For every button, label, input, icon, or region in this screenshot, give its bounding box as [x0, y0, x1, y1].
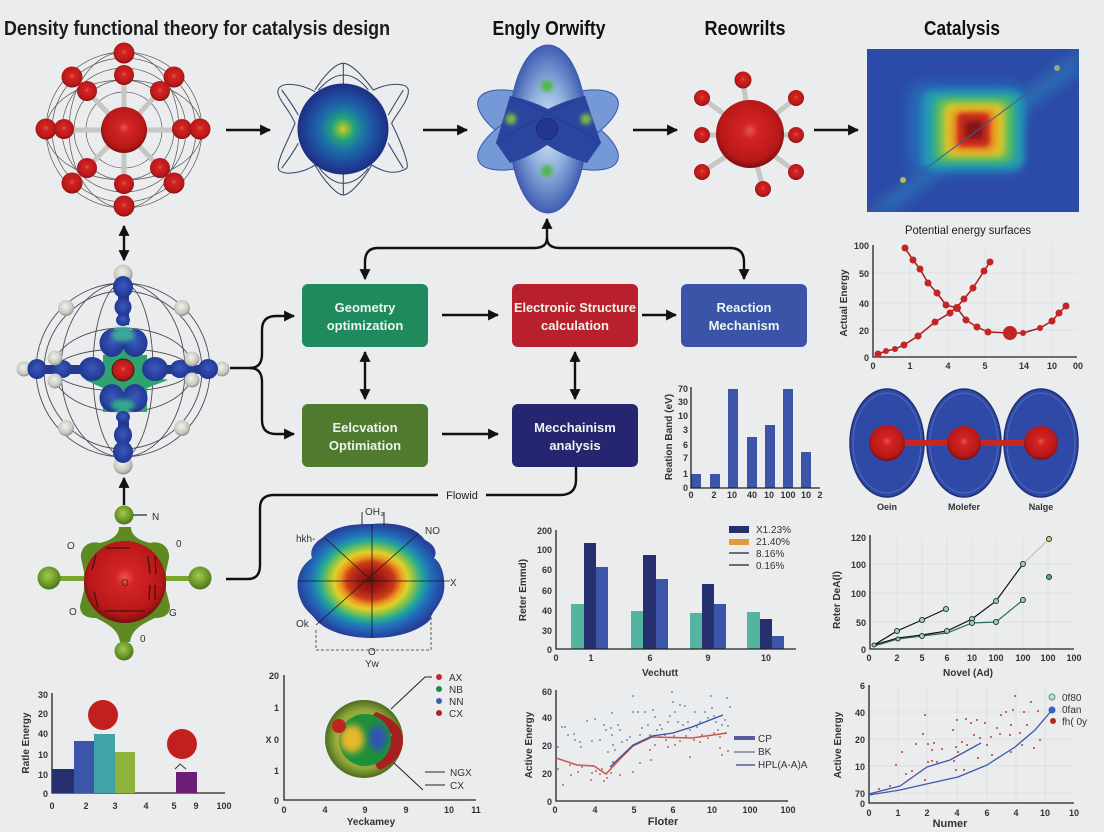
bar chart: grouped bars: 6 [647, 653, 653, 663]
scatter chart: active energy vs numer: 2 [924, 808, 930, 818]
scatter chart: active energy vs numer: 6 [860, 681, 865, 691]
bar chart: reaction band: 6 [683, 440, 688, 450]
heat map: elliptical density: O [368, 647, 376, 658]
line chart: novel: 100 [851, 560, 866, 570]
chart: layered sphere with legend: AX [449, 673, 463, 684]
box: reaction mechanism: Reaction [717, 300, 772, 315]
scatter chart: active energy vs numer: 0 [860, 799, 865, 809]
box: reaction mechanism: Mechanism [709, 318, 779, 333]
scatter chart: active energy vs floter: 0 [552, 805, 558, 815]
connector: flow line [226, 467, 576, 579]
arrow [633, 129, 677, 131]
chart: potential energy surfaces: Actual Energy [839, 269, 850, 337]
box: mechanism analysis: analysis [549, 438, 601, 453]
molecule: green shell around red sphere: O [69, 607, 77, 618]
arrows: molecule to optimization boxes [230, 316, 294, 434]
box: electronic structure calculation: Electronic Structure [514, 300, 636, 315]
diagram: three blue lobes with red atoms: Oein [877, 502, 897, 512]
heat map: elliptical density: Ok [296, 619, 310, 630]
bar chart: reaction band [664, 384, 823, 500]
molecule: green shell around red sphere: N [152, 512, 159, 523]
bar chart: bottom left energy: 40 [38, 729, 48, 739]
molecule: green shell around red sphere: O [121, 578, 129, 589]
arrow [423, 129, 467, 131]
box: mechanism analysis: Mecchainism [534, 420, 616, 435]
bar chart: reaction band: Reation Band (eV) [664, 394, 675, 480]
connector: flow line: Flowid [446, 490, 478, 502]
chart: layered sphere with legend: 0 [281, 805, 287, 815]
orbital: blue lobes [467, 45, 629, 213]
molecule: green shell around red sphere: 0 [176, 539, 182, 550]
scatter chart: active energy vs floter: 100 [780, 805, 796, 815]
bar chart: reaction band: 0 [683, 483, 688, 493]
chart: potential energy surfaces: 5 [982, 361, 988, 371]
bar chart: grouped bars: 40 [542, 606, 552, 616]
chart: potential energy surfaces: 00 [1073, 361, 1083, 371]
scatter chart: active energy vs floter: 60 [542, 687, 552, 697]
scatter chart: active energy vs numer: Active Energy [833, 711, 844, 778]
scatter chart: active energy vs floter: Active Energy [524, 711, 535, 778]
arrow [442, 433, 498, 435]
double arrow [574, 352, 576, 399]
line chart: novel: 6 [944, 653, 950, 663]
bar chart: bottom left energy: 5 [171, 801, 177, 811]
bar chart: reaction band: 3 [683, 425, 688, 435]
scatter chart: active energy vs numer: 0 [866, 808, 872, 818]
bar chart: grouped bars: 21.40% [756, 537, 790, 548]
molecule: green shell around red sphere: O [67, 541, 75, 552]
bar chart: grouped bars: 100 [537, 545, 552, 555]
scatter chart: active energy vs numer: 6 [984, 808, 990, 818]
bar chart: bottom left energy: 30 [38, 690, 48, 700]
scatter chart: active energy vs numer: Numer [933, 818, 968, 830]
chart: layered sphere with legend: 9 [403, 805, 409, 815]
chart: layered sphere with legend: NGX [450, 768, 472, 779]
molecule: blue cross with rings [16, 264, 230, 474]
bar chart: reaction band: 10 [678, 411, 688, 421]
bar chart: grouped bars: 0 [553, 653, 559, 663]
diagram: three blue lobes with red atoms [850, 389, 1078, 512]
line chart: novel: Reter DeA(l) [832, 571, 843, 629]
line chart: novel: Novel (Ad) [943, 668, 993, 679]
chart: layered sphere with legend: NB [449, 685, 463, 696]
title: Density functional theory for catalysis design [4, 18, 390, 40]
diagram: three blue lobes with red atoms: Molefer [948, 502, 980, 512]
chart: potential energy surfaces: 14 [1019, 361, 1029, 371]
scatter chart: active energy vs floter: 4 [592, 805, 598, 815]
double arrow [364, 352, 366, 399]
box: elevation optimization: Eelcvation [332, 420, 398, 435]
bar chart: grouped bars: 8.16% [756, 549, 784, 560]
line chart: novel: 2 [894, 653, 900, 663]
line chart: novel: 100 [1066, 653, 1082, 663]
scatter chart: active energy vs numer: 4 [954, 808, 960, 818]
chart: layered sphere with legend: 11 [471, 805, 481, 815]
bar chart: bottom left energy: 4 [143, 801, 149, 811]
line chart: novel [832, 533, 1082, 679]
line chart: novel: 100 [1040, 653, 1056, 663]
heat map: elliptical density: X [450, 578, 457, 589]
bar chart: bottom left energy: 9 [193, 801, 199, 811]
arrow [814, 129, 858, 131]
chart: potential energy surfaces: 1 [907, 361, 913, 371]
box: elevation optimization: Optimiation [329, 438, 401, 453]
scatter chart: active energy vs floter: 5 [631, 805, 637, 815]
chart: potential energy surfaces: 10 [1047, 361, 1057, 371]
bar chart: grouped bars: 60 [542, 586, 552, 596]
scatter chart: active energy vs floter: 100 [742, 805, 758, 815]
chart: layered sphere with legend: CX [450, 781, 464, 792]
chart: potential energy surfaces: 4 [945, 361, 951, 371]
heading: results: Reowrilts [704, 18, 786, 40]
chart: potential energy surfaces: 20 [859, 326, 869, 336]
orbital: density sphere with petals [278, 63, 408, 195]
bar chart: bottom left energy: 10 [38, 750, 48, 760]
bar chart: grouped bars: 30 [542, 626, 552, 636]
line chart: novel: 120 [851, 533, 866, 543]
heat map: elliptical density: NO [425, 526, 440, 537]
bar chart: reaction band: 1 [683, 469, 688, 479]
chart: layered sphere with legend: 10 [444, 805, 454, 815]
arrow [226, 129, 270, 131]
box: geometry optimization: optimization [327, 318, 403, 333]
line chart: novel: 0 [866, 653, 872, 663]
bar chart: reaction band: 10 [727, 490, 737, 500]
chart: layered sphere with legend: 4 [322, 805, 328, 815]
chart: layered sphere with legend: NN [449, 697, 463, 708]
line chart: novel: 50 [856, 618, 866, 628]
bar chart: grouped bars: 9 [705, 653, 711, 663]
chart: layered sphere with legend: 1 [274, 703, 279, 713]
bar chart: grouped bars: X1.23% [756, 525, 791, 536]
scatter chart: active energy vs numer: 10 [1040, 808, 1050, 818]
double arrow [123, 226, 125, 260]
bar chart: grouped bars: Vechutt [642, 668, 679, 679]
chart: layered sphere with legend [265, 671, 481, 828]
box: elevation optimization [302, 404, 428, 467]
box: reaction mechanism [681, 284, 807, 347]
bar chart: grouped bars: 1 [588, 653, 594, 663]
box: electronic structure calculation [512, 284, 638, 347]
arrow [642, 314, 676, 316]
bar chart: bottom left energy: 2 [83, 801, 89, 811]
scatter chart: active energy vs numer: 4 [1013, 808, 1019, 818]
scatter chart: active energy vs floter: HPL(A-A)A [758, 760, 808, 771]
bar chart: reaction band: 40 [747, 490, 757, 500]
bar chart: reaction band: 10 [764, 490, 774, 500]
scatter chart: active energy vs floter: 0 [547, 797, 552, 807]
molecule: green shell around red sphere: 0 [140, 634, 146, 645]
heatmap: catalysis [867, 49, 1079, 212]
scatter chart: active energy vs floter: CP [758, 734, 772, 745]
scatter chart: active energy vs floter: 40 [542, 713, 552, 723]
scatter chart: active energy vs numer [833, 681, 1087, 830]
arrows: top bus from orbitals to boxes [365, 219, 744, 279]
scatter chart: active energy vs numer: 1 [895, 808, 901, 818]
molecule: green shell around red sphere: G [169, 608, 177, 619]
scatter chart: active energy vs numer: 70 [855, 789, 865, 799]
bar chart: reaction band: 7 [683, 453, 688, 463]
molecule: green shell around red sphere [38, 506, 212, 660]
bar chart: grouped bars: 60 [542, 565, 552, 575]
scatter chart: active energy vs numer: 10 [855, 762, 865, 772]
bar chart: grouped bars: 0 [547, 645, 552, 655]
bar chart: reaction band: 2 [711, 490, 717, 500]
bar chart: reaction band: 70 [678, 384, 688, 394]
chart: layered sphere with legend: 0 [274, 796, 279, 806]
bar chart: bottom left energy: 0 [49, 801, 55, 811]
chart: layered sphere with legend: Yeckamey [347, 817, 396, 828]
box: electronic structure calculation: calculation [541, 318, 609, 333]
molecule: red wireframe cluster [36, 42, 210, 216]
bar chart: grouped bars: 200 [537, 526, 552, 536]
chart: layered sphere with legend: X 0 [265, 735, 279, 745]
heat map: elliptical density: Yw [365, 659, 380, 670]
chart: potential energy surfaces: 100 [854, 241, 869, 251]
chart: layered sphere with legend: CX [449, 709, 463, 720]
scatter chart: active energy vs numer: fh( 0y [1062, 717, 1087, 728]
heading: catalysis: Catalysis [924, 18, 1000, 40]
scatter chart: active energy vs floter [524, 687, 808, 828]
scatter chart: active energy vs floter: Floter [648, 816, 679, 828]
line chart: novel: 100 [988, 653, 1004, 663]
heat map: elliptical density [296, 507, 457, 670]
bar chart: grouped bars [518, 525, 796, 679]
heat map: elliptical density: OH₃ [365, 507, 384, 518]
chart: potential energy surfaces: 0 [870, 361, 876, 371]
chart: potential energy surfaces: Potential energy surfaces [905, 223, 1031, 237]
chart: layered sphere with legend: 1 [274, 766, 279, 776]
line chart: novel: 0 [861, 645, 866, 655]
arrow [123, 478, 125, 505]
bar chart: bottom left energy: Ratle Energy [21, 712, 32, 774]
bar chart: bottom left energy: 0 [43, 789, 48, 799]
scatter chart: active energy vs floter: BK [758, 747, 772, 758]
line chart: novel: 5 [919, 653, 925, 663]
diagram: three blue lobes with red atoms: Nalge [1029, 502, 1053, 512]
bar chart: bottom left energy: 20 [38, 709, 48, 719]
bar chart: reaction band: 2 [817, 490, 823, 500]
scatter chart: active energy vs numer: 10 [1069, 808, 1079, 818]
chart: potential energy surfaces: 0 [864, 353, 869, 363]
chart: layered sphere with legend: 9 [362, 805, 368, 815]
arrow [442, 314, 498, 316]
scatter chart: active energy vs numer: 20 [855, 735, 865, 745]
chart: potential energy surfaces: 50 [859, 269, 869, 279]
scatter chart: active energy vs floter: 20 [542, 769, 552, 779]
bar chart: bottom left energy: 10 [38, 770, 48, 780]
bar chart: bottom left energy: 3 [112, 801, 118, 811]
chart: potential energy surfaces [839, 223, 1083, 371]
box: mechanism analysis [512, 404, 638, 467]
chart: layered sphere with legend: 20 [269, 671, 279, 681]
molecule: red atom with spokes [694, 72, 804, 197]
bar chart: grouped bars: Reter Emmd) [518, 559, 529, 621]
bar chart: reaction band: 30 [678, 397, 688, 407]
line chart: novel: 100 [1015, 653, 1031, 663]
scatter chart: active energy vs floter: 6 [670, 805, 676, 815]
box: geometry optimization: Geometry [335, 300, 396, 315]
bar chart: bottom left energy [21, 690, 232, 811]
heading: energy orbitals: Engly Orwifty [492, 18, 606, 40]
chart: potential energy surfaces: 40 [859, 299, 869, 309]
bar chart: grouped bars: 10 [761, 653, 771, 663]
bar chart: reaction band: 100 [780, 490, 796, 500]
bar chart: bottom left energy: 100 [216, 801, 232, 811]
line chart: novel: 10 [967, 653, 977, 663]
line chart: novel: 100 [851, 589, 866, 599]
bar chart: reaction band: 10 [801, 490, 811, 500]
scatter chart: active energy vs floter: 20 [542, 741, 552, 751]
bar chart: grouped bars: 0.16% [756, 561, 784, 572]
bar chart: reaction band: 0 [688, 490, 694, 500]
heat map: elliptical density: hkh- [296, 534, 315, 545]
scatter chart: active energy vs numer: 0f80 [1062, 693, 1082, 704]
scatter chart: active energy vs numer: 0fan [1062, 705, 1081, 716]
scatter chart: active energy vs numer: 40 [855, 708, 865, 718]
scatter chart: active energy vs floter: 10 [707, 805, 717, 815]
box: geometry optimization [302, 284, 428, 347]
